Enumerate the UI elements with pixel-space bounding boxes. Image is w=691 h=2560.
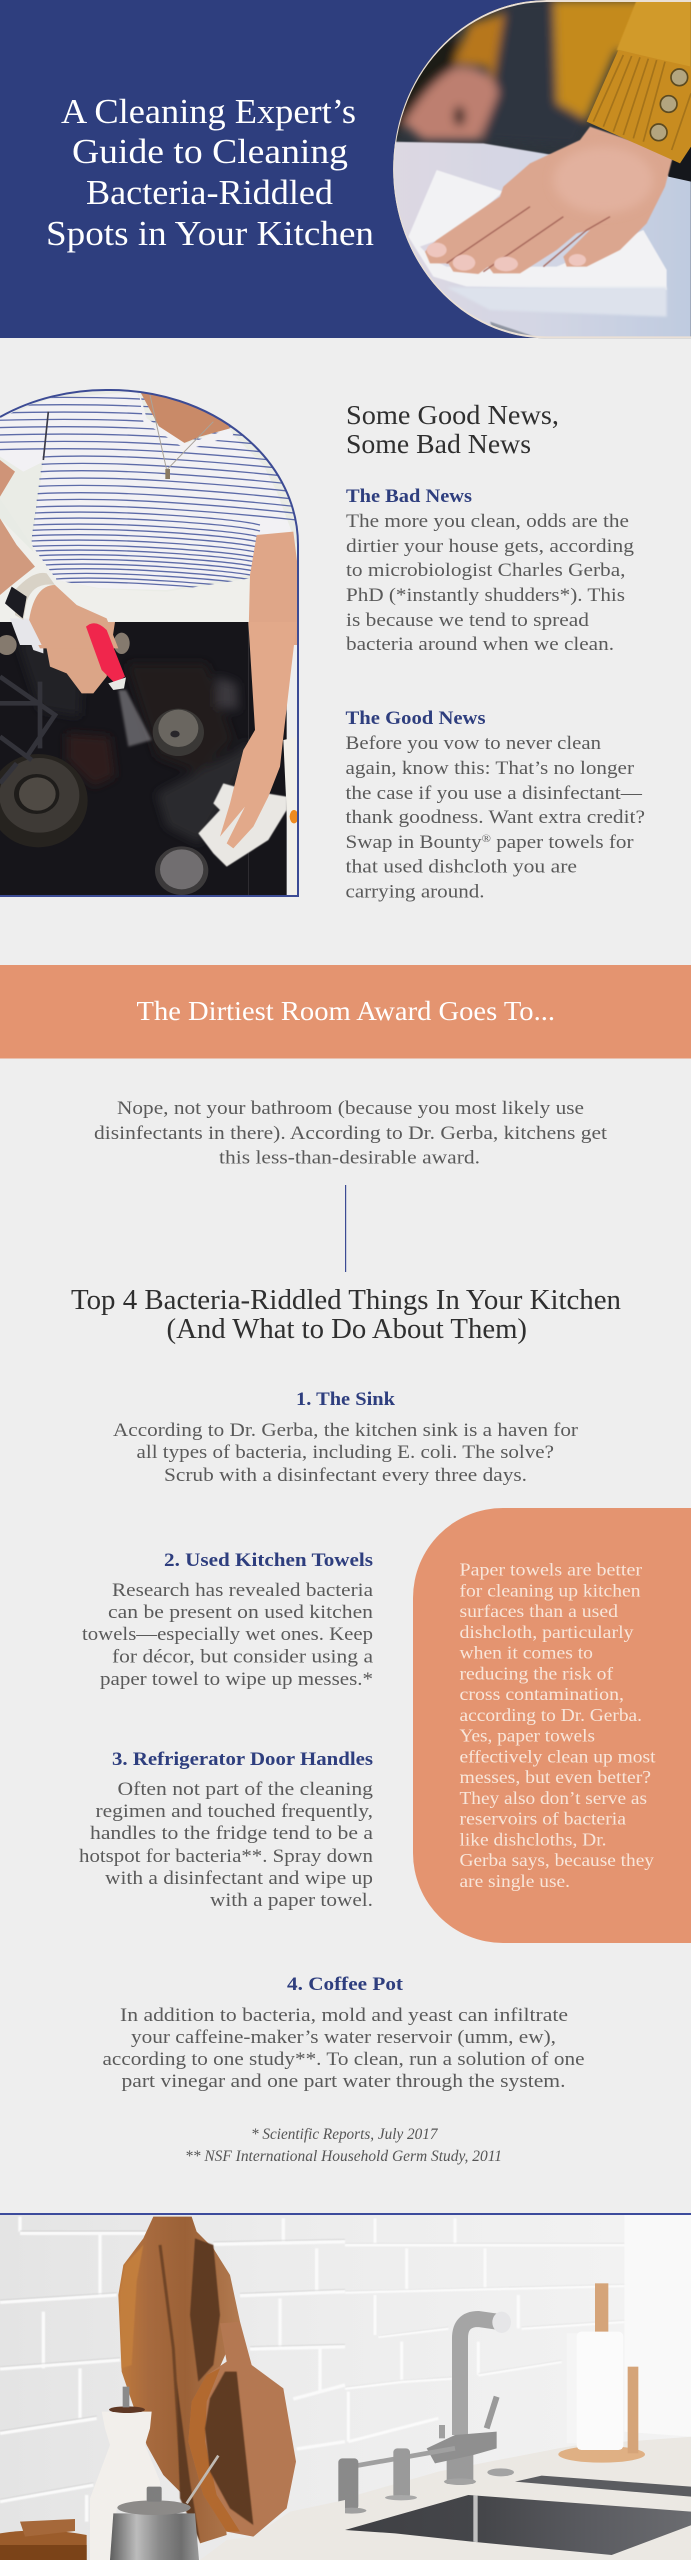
title: Spots in Your Kitchen: [46, 214, 374, 253]
item 3: refrigerator door handles: with a paper towel.: [210, 1890, 373, 1911]
callout: paper towels are better: surfaces than a used: [460, 1601, 618, 1621]
counter: [345, 2437, 691, 2560]
callout: paper towels are better: according to Dr. Gerba.: [460, 1705, 642, 1725]
heading: top 4 things: [71, 1285, 621, 1345]
arch border: [0, 390, 298, 896]
counter: [200, 2500, 345, 2560]
heading: top 4 things: (And What to Do About Them): [166, 1314, 527, 1345]
panel: good news bad news: [0, 385, 645, 902]
callout: paper towels are better: Gerba says, because they: [460, 1850, 654, 1870]
callout: paper towels are better: They also don’t serve as: [460, 1788, 647, 1808]
item 2: used kitchen towels: for décor, but consider using a: [112, 1646, 374, 1668]
photo: kitchen sink with cutting boards: [0, 2213, 691, 2560]
callout: paper towels are better: reducing the risk of: [460, 1664, 613, 1684]
text block: the bad news: The more you clean, odds are the: [346, 511, 629, 532]
item 1: the sink: According to Dr. Gerba, the kitchen sink is a haven for: [113, 1420, 579, 1441]
callout: paper towels are better: reservoirs of bacteria: [460, 1809, 626, 1829]
cutting board large: [118, 2217, 240, 2543]
photo: person spraying stove top: [0, 385, 300, 899]
callout: paper towels are better: messes, but even better?: [460, 1767, 651, 1787]
item 3: refrigerator door handles: hotspot for bacteria**. Spray down: [79, 1846, 374, 1867]
footnotes: [185, 2126, 502, 2165]
text block: the good news: thank goodness. Want extra credit?: [346, 807, 645, 828]
left half: cutting boards and jars: [0, 2217, 345, 2560]
item 1: the sink: Scrub with a disinfectant every three days.: [164, 1465, 527, 1486]
item 3: refrigerator door handles: regimen and touched frequently,: [96, 1801, 373, 1822]
item 3: refrigerator door handles: Often not part of the cleaning: [118, 1779, 374, 1800]
header banner: [0, 0, 691, 338]
footnotes: ** NSF International Household Germ Study, 2011: [185, 2148, 502, 2165]
text block: the good news: ®: [482, 833, 491, 845]
text block: intro paragraph: disinfectants in there). According to Dr. Gerba, kitchens get: [94, 1123, 608, 1144]
text block: the good news: again, know this: That’s no longer: [346, 758, 635, 779]
item 2: used kitchen towels: towels—especially wet ones. Keep: [82, 1624, 373, 1645]
item 4: coffee pot: according to one study**. To clean, run a solution of one: [102, 2049, 584, 2070]
icon: watch: [5, 573, 55, 620]
text block: the bad news: The Bad News: [346, 486, 472, 507]
text block: the good news: paper towels for: [491, 832, 634, 853]
wooden box: [0, 2519, 87, 2560]
text block: the bad news: [346, 486, 635, 655]
item 4: coffee pot: In addition to bacteria, mold and yeast can infiltrate: [120, 2005, 568, 2026]
text block: intro paragraph: Nope, not your bathroom (because you most likely use: [117, 1098, 584, 1119]
heading: some good news: Some Bad News: [346, 429, 531, 459]
callout: paper towels are better: [413, 1508, 691, 1943]
item 3: refrigerator door handles: 3. Refrigerator Door Handles: [112, 1749, 373, 1770]
text block: the bad news: is because we tend to spread: [346, 610, 590, 631]
item 2: used kitchen towels: can be present on used kitchen: [108, 1602, 374, 1623]
item 1: the sink: all types of bacteria, including E. coli. The solve?: [136, 1442, 554, 1463]
callout: paper towels are better: for cleaning up kitchen: [460, 1580, 640, 1600]
title: A Cleaning Expert’s: [61, 92, 356, 131]
icon: red spray bottle: [86, 623, 126, 690]
item 2: used kitchen towels: paper towel to wipe up messes.*: [100, 1669, 373, 1690]
footnotes: * Scientific Reports, July 2017: [251, 2126, 438, 2143]
banner: dirtiest room award: The Dirtiest Room Award Goes To...: [136, 996, 555, 1026]
text block: the good news: [346, 708, 645, 902]
text block: the good news: Swap in Bounty: [346, 832, 468, 853]
text block: intro paragraph: this less-than-desirable award.: [219, 1148, 480, 1168]
callout: paper towels are better: effectively clean up most: [460, 1746, 656, 1766]
item 4: coffee pot: your caffeine-maker’s water reservoir (umm, ew),: [131, 2027, 556, 2048]
title: Guide to Cleaning: [72, 132, 348, 171]
text block: the good news: The Good News: [346, 708, 486, 729]
banner: dirtiest room award: [0, 965, 691, 1058]
photo: hand wiping counter with paper towel: [390, 0, 691, 338]
item 2: used kitchen towels: [82, 1550, 374, 1690]
callout: paper towels are better: like dishcloths, Dr.: [460, 1830, 606, 1850]
text block: the good news: the case if you use a disinfectant—: [346, 783, 643, 804]
text block: the bad news: PhD (*instantly shudders*). This: [346, 585, 625, 606]
item 3: refrigerator door handles: with a disinfectant and wipe up: [105, 1868, 373, 1889]
heading: some good news: [346, 400, 559, 459]
callout: paper towels are better: when it comes to: [460, 1643, 593, 1663]
text block: the good news: Before you vow to never clean: [346, 733, 602, 754]
icon: sweater buttons: [650, 69, 688, 141]
text block: the good news: that used dishcloth you are: [346, 856, 577, 878]
item 2: used kitchen towels: 2. Used Kitchen Towels: [164, 1550, 373, 1571]
cutting board small: [188, 2322, 296, 2537]
item 2: used kitchen towels: Research has revealed bacteria: [112, 1580, 374, 1601]
text block: the bad news: to microbiologist Charles Gerba,: [346, 560, 626, 581]
heading: top 4 things: Top 4 Bacteria-Riddled Things In Your Kitchen: [71, 1285, 621, 1316]
title: [46, 92, 374, 253]
item 3: refrigerator door handles: [79, 1749, 374, 1911]
text block: the bad news: bacteria around when we clean.: [346, 634, 614, 655]
sink: [345, 2476, 691, 2555]
item 4: coffee pot: 4. Coffee Pot: [287, 1974, 404, 1995]
faucet: [337, 2312, 514, 2514]
text block: intro paragraph: [94, 1098, 608, 1168]
callout: paper towels are better: Paper towels are better: [460, 1560, 642, 1580]
paper towel holder: [558, 2283, 645, 2463]
item 4: coffee pot: part vinegar and one part water through the system.: [122, 2071, 566, 2092]
icon: burners: [0, 709, 208, 895]
text block: the bad news: dirtier your house gets, according: [346, 536, 635, 557]
white jug: [90, 2387, 160, 2560]
item 1: the sink: 1. The Sink: [296, 1389, 395, 1410]
item 3: refrigerator door handles: handles to the fridge tend to be a: [90, 1823, 374, 1844]
steel pot: [110, 2456, 218, 2560]
shirt stripes: [0, 397, 300, 595]
title: Bacteria-Riddled: [86, 173, 334, 212]
text block: the good news: carrying around.: [346, 882, 484, 902]
callout: paper towels are better: cross contamination,: [460, 1684, 624, 1704]
item 1: the sink: [113, 1389, 579, 1486]
item 4: coffee pot: [102, 1974, 584, 2092]
callout: paper towels are better: dishcloth, particularly: [460, 1622, 634, 1642]
heading: some good news: Some Good News,: [346, 400, 559, 430]
callout: paper towels are better: Yes, paper towels: [460, 1726, 595, 1746]
callout: paper towels are better: are single use.: [460, 1871, 570, 1891]
right half: faucet, sink and paper towels: [337, 2215, 691, 2560]
